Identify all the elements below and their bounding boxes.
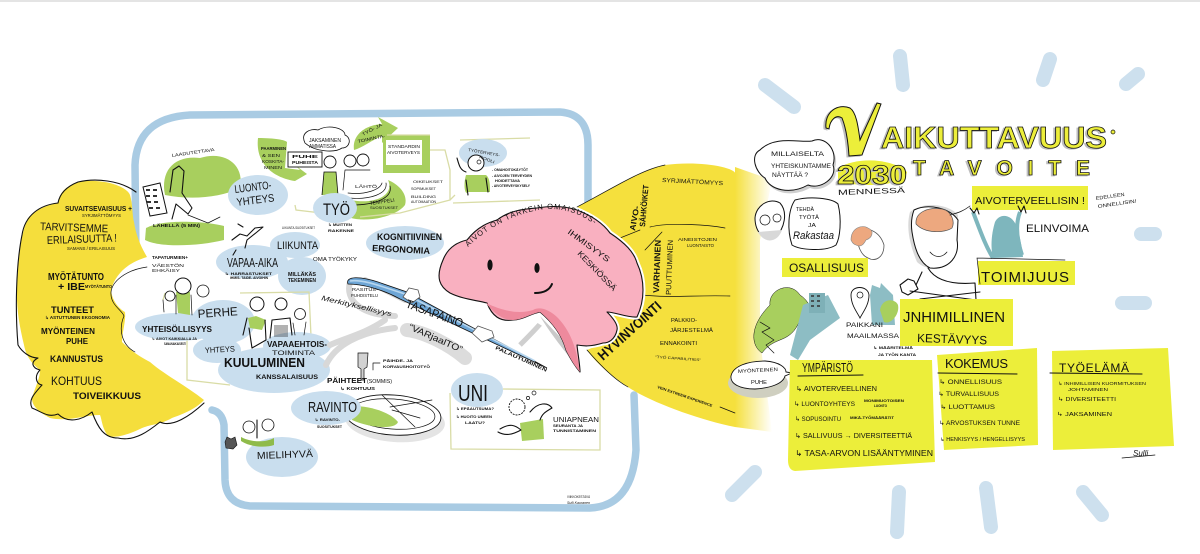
panel: työ: OIKEUKSET <box>413 179 444 184</box>
panel: perhe and kuuluminen: YHTEISÖLLISYYS <box>142 325 213 334</box>
panel: right yellow head: ENNAKOINTI <box>660 341 697 347</box>
panel: työterveyshuolto <box>457 139 532 195</box>
panel: balance beam <box>321 278 548 374</box>
signature <box>1122 449 1155 458</box>
panel: päihteet <box>327 353 430 391</box>
panel: uni: UNI <box>458 380 488 406</box>
panel: ympäristö: MIKÄ-TYÖMÄÄRÄTIT <box>850 416 895 420</box>
panel: työ: AUTOMAATION <box>411 199 436 204</box>
panel: työelämä: ↳ INHIMILLISEN KUORMITUKSEN <box>1058 381 1147 387</box>
panel: ympäristö: LUONTO <box>874 404 887 408</box>
panel: työ: TYÖ <box>323 200 350 219</box>
panel: työterveyshuolto: - OMAHOITOKÄYTÖT <box>492 168 529 172</box>
panel: right yellow head: “TYÖ CAPABILITIES” <box>655 355 702 362</box>
label: inhimillinen kestävyys: JNHIMILLINEN <box>903 310 1005 326</box>
illustration: place in the world: PAIKKANI <box>846 322 883 329</box>
panel: työelämä: ↳ DIVERSITEETTI <box>1058 396 1117 403</box>
panel: ympäristö: MONIMUOTOISEN <box>864 399 905 403</box>
panel: kokemus <box>937 348 1038 450</box>
panel: myönteinen puhe callout <box>728 361 792 398</box>
panel: perhe and kuuluminen: KANSSALAISUUS <box>256 374 319 381</box>
panel: kokemus: ↳ ARVOSTUKSEN TUNNE <box>939 420 1020 427</box>
panel: perhe and kuuluminen: VAPAAEHTOIS- <box>267 340 327 349</box>
panel: vapaa-aika and liikunta: KOGNITIIVINEN <box>377 232 442 242</box>
panel: myönteinen puhe callout: MYÖNTEINEN <box>738 366 779 375</box>
panel: right yellow head: LUONTAISTO <box>687 243 715 248</box>
panel: cloud question <box>755 140 836 193</box>
panel: työelämä <box>1050 348 1174 450</box>
illustration: big head with brain <box>900 205 980 300</box>
panel: kokemus: ↳ TURVALLISUUS <box>938 391 999 398</box>
panel: balance beam: “VARjaalTO” <box>407 322 464 354</box>
panel: työterveyshuolto: TYÖTERVEYS- <box>468 147 501 158</box>
label: osallisuus <box>782 258 868 277</box>
blue frame <box>135 112 636 508</box>
panel: right yellow head: SÄHKÖIKET <box>638 184 651 227</box>
panel: right yellow head: JÄRJESTELMÄ <box>670 327 714 334</box>
panel: uni <box>450 373 600 450</box>
panel: työ: STANDARDIN <box>388 144 420 149</box>
panel: right yellow head <box>577 163 772 432</box>
panel: ympäristö: ↳ SALLIVUUS → DIVERSITEETTIÄ <box>795 432 912 440</box>
illustration: place in the world: ↳ MÄÄRITELMÄ <box>873 345 913 350</box>
panel: left yellow cloud: ↳ ASTUTTUNEN EKGONOMIA <box>45 315 111 320</box>
signature small: VIIKKOKESTÄVÄ <box>567 495 590 499</box>
title: AIKUTTAVUUS <box>881 120 1107 155</box>
panel: työterveyshuolto: - AIVOJEN TERVEYDEN <box>492 174 532 178</box>
panel: ympäristö: ↳ AIVOTERVEELLINEN <box>796 385 877 393</box>
signature small <box>567 495 591 505</box>
panel: mielihyvä <box>225 419 318 477</box>
panel: kokemus: ↳ LUOTTAMUS <box>940 404 995 411</box>
panel: left yellow cloud: TOIVEIKKUUS <box>73 391 141 401</box>
panel: perhe and kuuluminen: TOIMINTA <box>272 350 316 357</box>
panel: työ: RAKENNE <box>328 228 354 233</box>
panel: vapaa-aika and liikunta: LIIKUNTA-SUOSITUKSET <box>282 226 315 230</box>
illustration: brain: AIVOT ON TÄRKEIN OMAISUUS- <box>466 204 596 247</box>
label: inhimillinen kestävyys: KESTÄVYYS <box>917 331 987 347</box>
illustration: place in the world: JA TYÖN KANTA <box>878 352 916 357</box>
panel: ympäristö: ↳ TASA-ARVON LISÄÄNTYMINEN <box>795 449 933 458</box>
panel: vapaa-aika and liikunta: ↳ HARRASTUKSET <box>225 272 273 276</box>
panel: perhe and kuuluminen <box>135 278 331 393</box>
panel: työ: KOSKITA- <box>262 159 285 164</box>
panel: työ: MINEN <box>264 165 282 170</box>
panel: balance beam: PALAUTUMINEN <box>494 345 548 374</box>
panel: uni: UNIAPNEAN <box>553 417 599 424</box>
panel: perhe and kuuluminen: YHTEYS <box>205 344 235 355</box>
sun rays <box>732 56 1155 532</box>
label: aivoterveellisin: AIVOTERVEELLISIN ! <box>975 195 1085 207</box>
panel: työterveyshuolto: ROOLI <box>479 154 495 164</box>
panel: päihteet: PÄIHDE- JA <box>383 359 413 363</box>
panel: balance beam: TASAPAINO <box>404 297 465 330</box>
panel: luontoyhteys: LAADUTETTAVA <box>171 147 215 158</box>
panel: cloud question: NÄYTTÄÄ ? <box>772 171 808 179</box>
panel: left yellow cloud: ERILAISUUTTA ! <box>47 233 117 247</box>
panel: vapaa-aika and liikunta: MILLÄKÄS <box>288 271 317 278</box>
illustration: brain: KESKIÖSSÄ <box>576 249 619 293</box>
panel: right yellow head: SYRJIMÄTTÖMYYS <box>662 177 723 187</box>
panel: perhe and kuuluminen: ↳ AIVOT KAIKKIALLA JA <box>152 337 197 341</box>
panel: työ: TOIMINTA- <box>357 133 386 144</box>
panel: työ: AMMATISSA <box>309 144 337 150</box>
panel: ravinto: SUOSITUKSET <box>317 425 343 429</box>
illustration: bearded man with speech bubble: TYÖTÄ <box>799 214 819 221</box>
panel: cloud question: MILLAISELTA <box>771 151 825 158</box>
panel: right yellow head: AIVO- <box>628 205 641 231</box>
panel: päihteet: KORVAUSHOITOTYÖ <box>383 364 430 369</box>
panel: right yellow head: HYVINVOINTI <box>594 298 664 363</box>
panel: kokemus: KOKEMUS <box>945 356 1008 371</box>
signature: Sulli <box>1133 449 1148 458</box>
panel: työ: JAKSAMINEN <box>309 138 341 144</box>
panel: perhe and kuuluminen: SAMANAIKAISESTI <box>164 342 186 346</box>
panel: balance beam: RASITUS- <box>352 287 379 292</box>
panel: myönteinen puhe callout: PUHE <box>751 380 768 386</box>
panel: työ: AIVOTERVEYS <box>387 150 420 155</box>
panel: työ <box>258 117 540 233</box>
panel: left yellow cloud: KOHTUUS <box>51 374 102 388</box>
illustration: small head <box>851 226 884 259</box>
illustration: brain: IHMISYYS <box>566 227 612 264</box>
label: aivoterveellisin <box>972 186 1137 210</box>
panel: uni: SEURANTA JA <box>553 424 583 428</box>
panel: työelämä: ↳ JAKSAMINEN <box>1057 411 1112 418</box>
panel: mielihyvä: MIELIHYVÄ <box>257 448 313 462</box>
signature small: Sulli Kauranen <box>567 500 591 505</box>
illustration: bearded man with speech bubble <box>755 198 840 250</box>
title: TAVOITE <box>913 157 1090 180</box>
title <box>826 103 1115 180</box>
panel: luontoyhteys: YHTEYS <box>236 192 275 209</box>
label: toimijuus <box>977 258 1075 286</box>
panel: työ: SOPIMUKSET <box>411 186 437 191</box>
panel: työelämä: JOHTAMINEN <box>1068 387 1109 393</box>
panel: right yellow head: PALKKIO- <box>671 318 697 324</box>
label: inhimillinen kestävyys <box>900 299 1013 347</box>
panel: työelämä: TYÖELÄMÄ <box>1059 361 1129 375</box>
panel: vapaa-aika and liikunta: VAPAA-AIKA <box>227 255 278 270</box>
label: osallisuus: OSALLISUUS <box>789 261 864 275</box>
panel: ravinto: ↳ RAVINTO- <box>315 418 341 422</box>
illustration: brain <box>438 204 646 373</box>
panel: työ: PUHE <box>292 154 318 159</box>
panel: ravinto <box>291 391 446 445</box>
label: aivoterveellisin: ONNELLISIN! <box>1097 199 1137 210</box>
panel: kokemus: ↳ HENKISYYS / HENGELLISYYS <box>940 437 1026 443</box>
panel: kokemus: ↳ ONNELLISUUS <box>939 379 1003 386</box>
panel: vapaa-aika and liikunta: OMA TYÖKYKY <box>313 256 358 263</box>
panel: left yellow cloud: MYÖNTEINEN <box>41 326 95 336</box>
panel: left yellow cloud: PUHE <box>66 336 88 346</box>
panel: left yellow cloud: SAMANS / ERILAISUUS <box>67 246 115 251</box>
panel: perhe and kuuluminen: PERHE <box>197 304 238 321</box>
panel: right yellow head: AINEISTOJEN <box>678 237 717 242</box>
illustration: bearded man with speech bubble: JA <box>808 223 816 229</box>
illustration: bearded man with speech bubble: TEHDÄ <box>796 206 814 213</box>
illustration: teal figure: ELINVOIMA <box>1026 223 1090 235</box>
panel: ympäristö: ↳ LUONTOYHTEYS <box>794 401 856 408</box>
panel: luontoyhteys: LUONTO- <box>234 180 272 196</box>
panel: cloud question: YHTEISKUNTAMME <box>771 164 831 170</box>
panel: left yellow cloud: MYÖTÄTUNTO <box>85 283 112 289</box>
illustration: place in the world: MAAILMASSA <box>847 333 900 340</box>
panel: vapaa-aika and liikunta: LIIKUNTA <box>277 240 319 252</box>
panel: uni: ↳ EPÄAUTSUMA? <box>456 406 495 411</box>
panel: perhe and kuuluminen: KUULUMINEN <box>224 355 305 370</box>
panel: left yellow cloud: SYRJIMÄTTÖMYYS <box>82 212 121 218</box>
year 2030: 2030 <box>837 160 907 190</box>
panel: right yellow head: PUUTTUMINEN <box>664 240 675 295</box>
panel: työterveyshuolto: - AIVOTERVEYSKYSELY <box>492 184 531 188</box>
label: aivoterveellisin: EDELLEEN <box>1095 192 1125 202</box>
label: toimijuus: TOIMIJUUS <box>981 269 1069 286</box>
panel: left yellow cloud <box>16 180 204 439</box>
illustration: teal figure <box>970 206 1090 258</box>
panel: uni: ↳ HUOITO UNEEN <box>456 414 492 419</box>
panel: vapaa-aika and liikunta: TAPATURMIEN+ <box>152 255 188 260</box>
illustration: place in the world <box>754 283 916 360</box>
panel: luontoyhteys: LÄHELLÄ (5 MIN) <box>153 222 201 228</box>
panel: työ: TEMPPELI <box>369 198 395 207</box>
panel: työ: LÄHTÖ <box>355 183 378 189</box>
panel: uni: LAATU? <box>465 420 486 425</box>
panel: työ: & SEN <box>262 153 280 158</box>
panel: vapaa-aika and liikunta: TEKEMINEN <box>288 278 316 284</box>
panel: työ: TYÖ- JA <box>361 121 383 137</box>
panel: left yellow cloud: SUVAITSEVAISUUS + <box>65 204 133 213</box>
panel: ympäristö: YMPÄRISTÖ <box>802 360 853 375</box>
panel: right yellow head: VARHAINEN <box>651 240 663 293</box>
panel: päihteet: ↳ KOHTUUS <box>340 386 375 391</box>
panel: työ: BUILDING <box>411 194 436 199</box>
panel: vapaa-aika and liikunta <box>152 224 444 295</box>
panel: ympäristö <box>788 360 935 471</box>
year 2030: MENNESSÄ <box>838 186 905 197</box>
panel: uni: TUNNISTAMINEN <box>553 429 597 433</box>
panel: left yellow cloud: MYÖTÄTUNTO <box>48 270 104 283</box>
panel: vapaa-aika and liikunta: EHKÄISY <box>152 267 180 273</box>
panel: päihteet: (SOMMIS) <box>367 379 392 385</box>
panel: työ: SUOSITUKSET <box>370 205 399 210</box>
panel: vapaa-aika and liikunta: IHMIS- TAIDE- AIVOIHIN <box>230 276 268 280</box>
panel: luontoyhteys <box>143 147 288 245</box>
panel: left yellow cloud: KANNUSTUS <box>50 354 103 364</box>
panel: left yellow cloud: TUNTEET <box>51 305 95 315</box>
panel: balance beam: Merkityksellisyys <box>321 295 393 318</box>
panel: left yellow cloud: + IBE <box>58 282 85 293</box>
panel: left yellow cloud: TARVITSEMME <box>40 221 108 235</box>
panel: right yellow head: VEIN EXTREEM EXPERIENCE <box>657 385 713 408</box>
panel: työterveyshuolto: HOIDETTAVA <box>495 179 521 183</box>
panel: työ: PUHEISTA <box>292 160 318 165</box>
year 2030 <box>837 160 907 197</box>
panel: vapaa-aika and liikunta: ERGONOMIA <box>372 243 431 256</box>
panel: balance beam: PUHDISTELU <box>351 293 378 298</box>
panel: vapaa-aika and liikunta: VÄESTÖN <box>152 262 184 268</box>
panel: ympäristö: ↳ SOPUSOINTU <box>795 416 841 423</box>
panel: työ: PAARMINEN <box>261 146 286 151</box>
panel: työ: ↳ MUITTEN <box>328 222 352 227</box>
panel: päihteet: PÄIHTEET <box>327 376 367 385</box>
panel: ravinto: RAVINTO <box>308 399 357 416</box>
illustration: bearded man with speech bubble: Rakastaa <box>793 230 834 242</box>
